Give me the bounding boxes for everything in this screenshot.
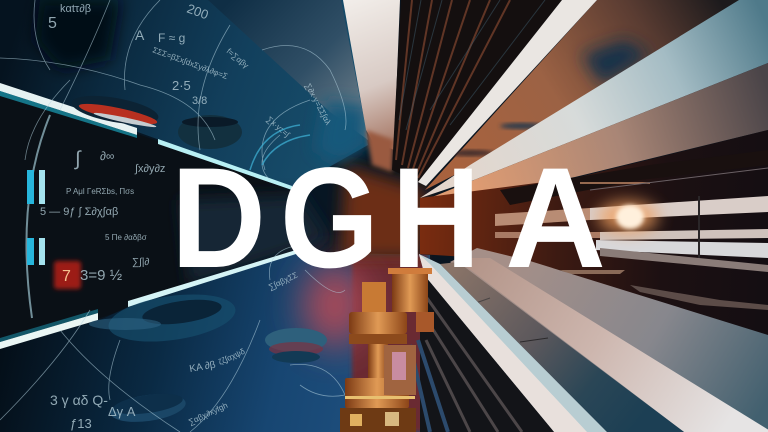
chalk scribbles and formula text: ∑αβχ∂xyfgh	[187, 401, 229, 427]
center: orange machine stack	[340, 268, 434, 432]
chalk scribbles and formula text: 200	[185, 1, 210, 22]
center: white diagonal beam	[418, 0, 597, 186]
right: white ledge strip	[419, 254, 607, 432]
title: DGHA: A	[505, 139, 606, 298]
centre: orange backdrop behind the letter H	[340, 165, 425, 258]
right: orange ceiling panel	[425, 0, 740, 190]
title: DGHA	[171, 139, 606, 298]
bottom center: dark vent stripes	[410, 276, 554, 432]
chalk scribbles and formula text: ∑∫|∂	[132, 257, 149, 268]
chalk scribbles and formula text: f=∑αβγ	[225, 47, 250, 70]
chalk scribbles and formula text	[0, 0, 346, 432]
chalk scribbles and formula text: ∫x∂y∂z	[134, 163, 165, 175]
left: upper blue chalkboard panel	[0, 0, 380, 300]
chalk scribbles and formula text: ∑∂x·y=ΣΣ∫αλ	[303, 82, 333, 126]
chalk scribbles and formula text: ∫	[74, 148, 82, 170]
chalk scribbles and formula text: ƒ13	[70, 416, 92, 431]
red indicator block: 7	[62, 268, 71, 285]
title: DGHA: D	[171, 139, 266, 298]
chalk scribbles and formula text: 5 Πe ∂αδβσ	[105, 233, 147, 242]
right: peach underside panel	[425, 63, 768, 200]
chalk scribbles and formula text: ∂∞	[100, 149, 114, 163]
red glow behind machine	[303, 255, 427, 432]
chalk scribbles and formula text: A	[135, 27, 145, 43]
chalk scribbles and formula text: F ≈ g	[158, 31, 185, 45]
chalk scribbles and formula text: 3 γ αδ Q-	[50, 392, 108, 408]
chalk scribbles and formula text: 5	[48, 15, 57, 32]
upper disc with red stripe	[70, 91, 242, 149]
right: dark machinery band	[420, 130, 768, 345]
left: vertical arc and cyan tabs	[26, 115, 50, 318]
right: lower silver floor	[440, 248, 768, 432]
chalk scribbles and formula text: ∑x·yz=∫	[265, 115, 292, 140]
red indicator block	[54, 261, 81, 289]
title: DGHA: H	[392, 139, 480, 298]
left: blue floor	[0, 252, 430, 432]
chalk scribbles and formula text: P Aμl ΓeRΣbs, Πσs	[66, 187, 134, 196]
center: pale column	[343, 0, 400, 172]
chalk scribbles and formula text: KA ∂β	[189, 360, 217, 375]
center: dark vent stripes	[392, 0, 562, 182]
title: DGHA: G	[280, 139, 379, 298]
chalk scribbles and formula text: 3=9 ½	[80, 267, 123, 284]
chalk scribbles and formula text: ζζ∫αχψδ	[217, 346, 247, 367]
chalk scribbles and formula text: ∑∫αβχΣΣ	[267, 270, 299, 292]
left: lower dark chalkboard panel	[0, 92, 330, 345]
chalk scribbles and formula text: 2·5	[172, 78, 191, 93]
chalk scribbles and formula text: ΣΣΣ=βΣx∫dxΣy∂λ∂φ=Σ	[151, 45, 229, 81]
chalk scribbles and formula text: 3/8	[192, 95, 207, 107]
glowing light strips	[0, 83, 296, 349]
right: bright blue-white beam	[420, 0, 768, 198]
chalk scribbles and formula text: 5 — 9ƒ ∫ Σ∂χ∫αβ	[40, 206, 118, 218]
chalk scribbles and formula text: Δγ A	[108, 404, 136, 419]
lower glassy discs	[89, 287, 327, 426]
right: bright window slats and glow	[495, 196, 768, 310]
chalk scribbles and formula text: kαtτ∂β	[60, 3, 91, 15]
